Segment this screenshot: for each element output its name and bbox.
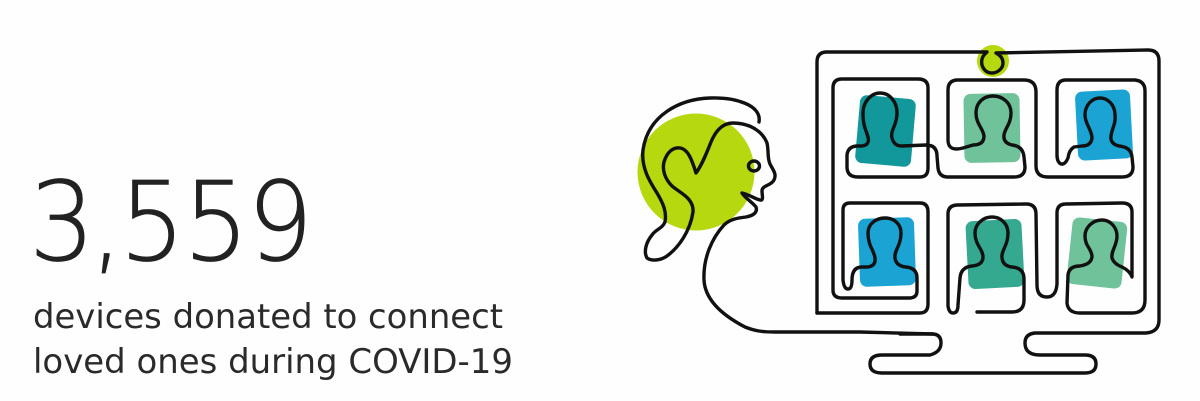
description text: loved ones during COVID-19 bbox=[33, 342, 513, 382]
tile: blue bottom bbox=[858, 217, 916, 287]
lower row of frames and portraits bbox=[817, 79, 1145, 313]
description text bbox=[33, 297, 513, 382]
big number: 3,559 bbox=[29, 159, 313, 287]
monitor outer frame with webcam loop bbox=[817, 50, 1159, 373]
icon: green circle behind head bbox=[638, 114, 754, 230]
tile: light green bottom bbox=[1066, 217, 1128, 289]
icon: continuous line drawing of monitor and person bbox=[643, 50, 1159, 373]
tile: green bottom bbox=[965, 219, 1025, 289]
tile: light green top bbox=[963, 93, 1021, 163]
eye bbox=[748, 161, 760, 171]
icon: webcam green circle bbox=[977, 45, 1009, 77]
description text: devices donated to connect bbox=[33, 297, 503, 337]
tile: blue top bbox=[1075, 89, 1133, 161]
tile: teal bbox=[855, 95, 916, 167]
person head, hair, shoulder and arm line bbox=[643, 98, 933, 334]
